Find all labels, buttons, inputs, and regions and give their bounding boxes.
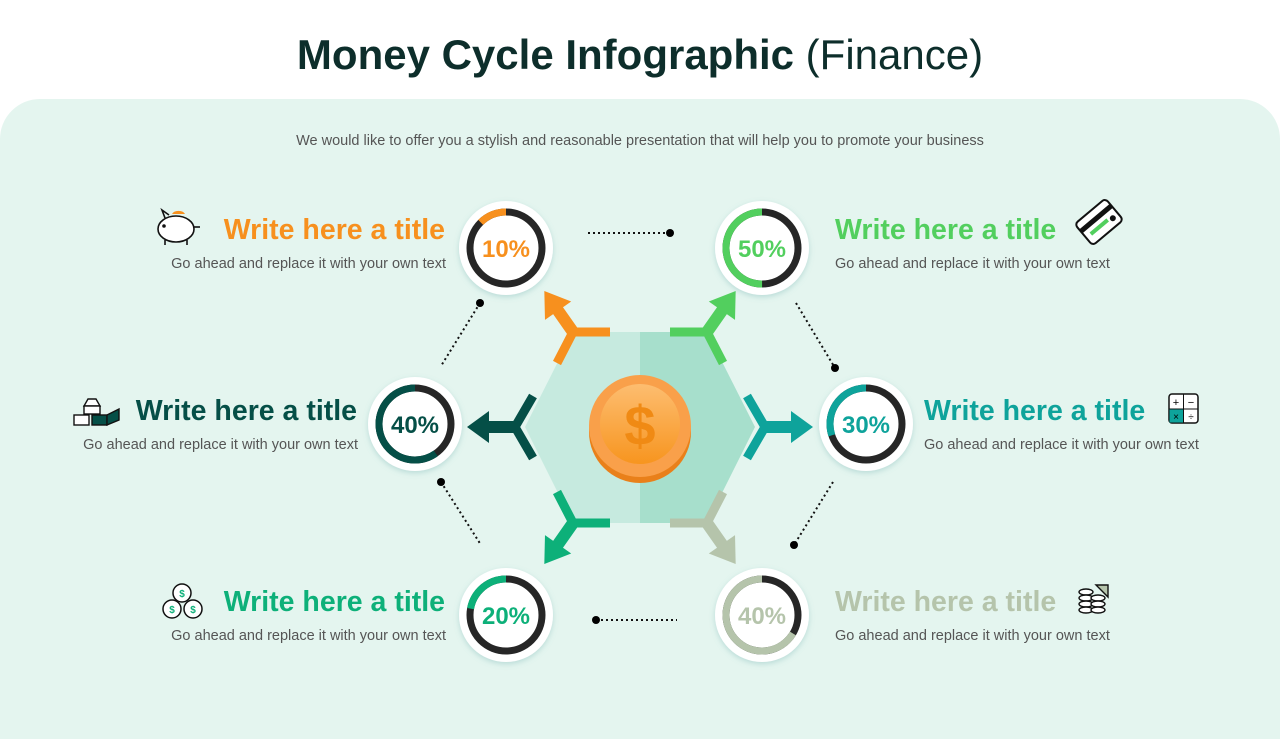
icon: calculator: × (1173, 412, 1179, 423)
text: Go ahead and replace it with your own text (835, 256, 1110, 272)
ring: 50% (715, 201, 809, 295)
text block: top right: Write here a title (835, 214, 1056, 246)
ring: 50%: 50% (738, 236, 786, 263)
ring: 40% left (368, 377, 462, 471)
arrow: emerald (531, 492, 610, 573)
ring: 10% (459, 201, 553, 295)
text: Go ahead and replace it with your own text (171, 628, 446, 644)
icon: gold bars (74, 399, 119, 425)
icon: calculator: − (1188, 397, 1194, 409)
ring: 20%: 20% (482, 603, 530, 630)
ring: 30%: 30% (842, 412, 890, 439)
icon: money bags: $ (179, 589, 185, 600)
ring: 40% right: 40% (738, 603, 786, 630)
coin (589, 375, 691, 483)
text: Go ahead and replace it with your own text (83, 437, 358, 453)
icon: money bags: $ (190, 605, 196, 616)
text block: middle left: Write here a title (136, 395, 357, 427)
icon: calculator: ÷ (1188, 412, 1194, 423)
arrow: teal (747, 396, 813, 458)
text block: bottom right: Write here a title (835, 586, 1056, 618)
icon: calculator: + (1173, 397, 1179, 409)
icon: piggy bank (158, 210, 200, 245)
text: Go ahead and replace it with your own text (835, 628, 1110, 644)
subtitle: We would like to offer you a stylish and reasonable presentation that will help you to promote your business (296, 133, 984, 149)
arrow: green (670, 282, 749, 363)
text block: top left: Write here a title (224, 214, 445, 246)
text: Go ahead and replace it with your own text (171, 256, 446, 272)
arrow: dark green (467, 396, 533, 458)
ring: 40% left: 40% (391, 412, 439, 439)
ring: 30% (819, 377, 913, 471)
text block: bottom left: Write here a title (224, 586, 445, 618)
icon: coins stack (1079, 585, 1108, 613)
hexagon (525, 332, 755, 523)
text: Go ahead and replace it with your own text (924, 437, 1199, 453)
text block: middle right: Write here a title (924, 395, 1145, 427)
icon: calculator (1169, 394, 1198, 423)
icon: money bags (163, 584, 202, 618)
dotted connectors (437, 229, 839, 624)
ring: 10%: 10% (482, 236, 530, 263)
title: Money Cycle Infographic (Finance) (297, 31, 983, 78)
arrow: orange (531, 282, 610, 363)
icon: credit card (1075, 198, 1123, 246)
ring: 20% (459, 568, 553, 662)
ring: 40% right (715, 568, 809, 662)
coin: $ (624, 394, 656, 457)
arrow: sage (670, 492, 749, 573)
icon: money bags: $ (169, 605, 175, 616)
